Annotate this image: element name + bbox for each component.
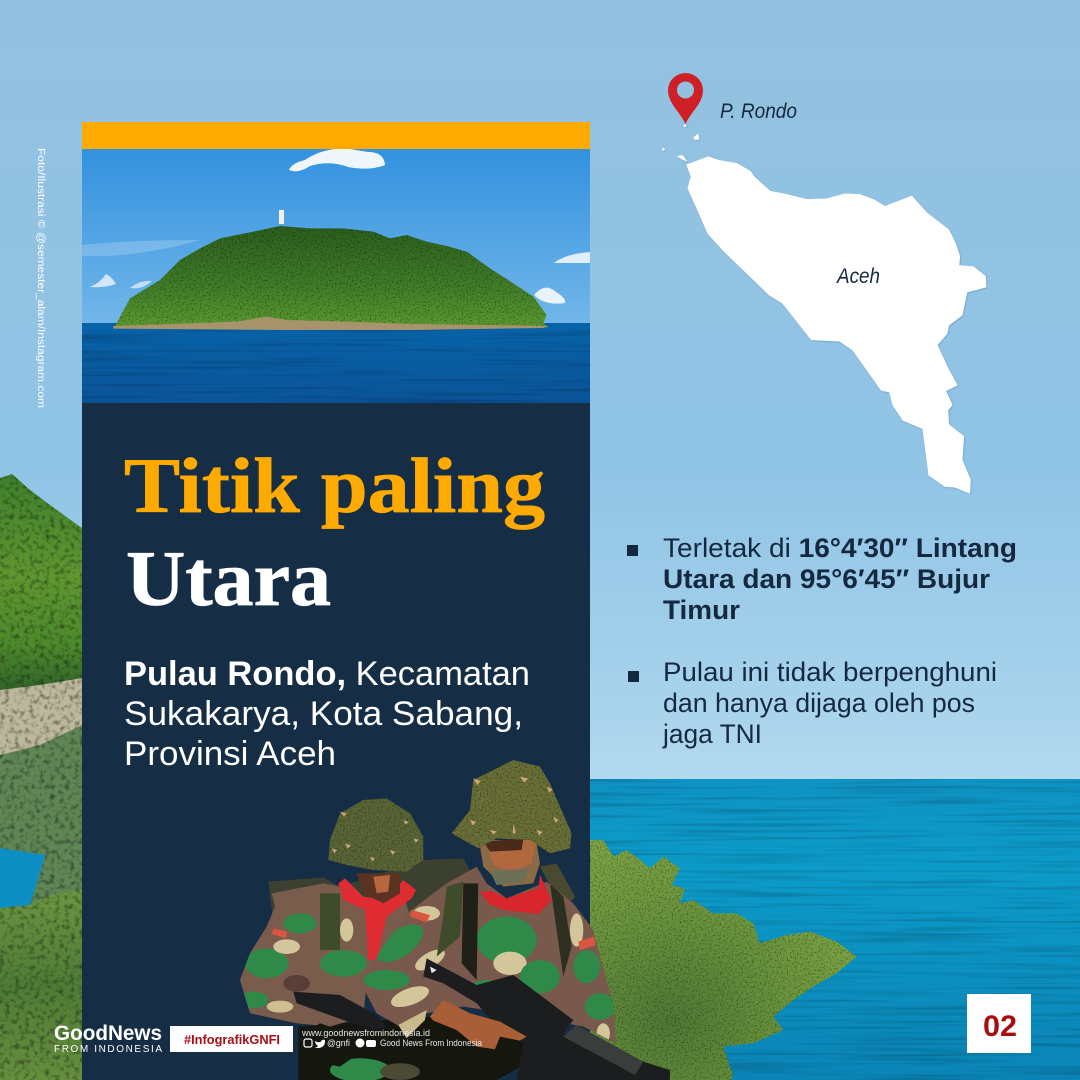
lower body shadows <box>298 1017 563 1080</box>
map pin: P. Rondo <box>668 73 703 124</box>
location description: Provinsi Aceh <box>124 735 336 773</box>
icon: twitter <box>315 1040 325 1048</box>
location description: Sukakarya, Kota Sabang, <box>124 695 523 733</box>
location description <box>124 655 530 773</box>
background: sea <box>0 779 1080 1080</box>
right soldier red scarf <box>480 875 552 914</box>
right soldier forearm and hand <box>430 1000 527 1049</box>
background: right bush <box>590 840 857 1080</box>
icon: facebook <box>356 1038 364 1048</box>
background: left coastal trees and cliff <box>0 474 82 1080</box>
fact 1: coordinates: Utara dan 95°6′45″ Bujur <box>663 564 991 594</box>
label: P. Rondo: P. Rondo <box>720 100 797 123</box>
right soldier shoulder patches <box>410 910 596 950</box>
social media links: www.goodnewsfromindonesia.id <box>301 1028 430 1038</box>
fact 1: coordinates <box>627 533 1017 625</box>
social media links: Good News From Indonesia <box>380 1038 482 1048</box>
logo: GoodNews From Indonesia <box>54 1022 162 1055</box>
photo: Rondo island <box>82 149 590 403</box>
logo: GoodNews From Indonesia: GoodNews <box>54 1022 162 1045</box>
hashtag badge: #InfografikGNFI <box>184 1032 280 1047</box>
orange header bar <box>82 122 590 149</box>
left soldier rifle <box>293 992 387 1030</box>
fact 2: uninhabited island: Pulau ini tidak berpenghuni <box>663 657 997 687</box>
fact 1: coordinates: Timur <box>663 595 741 625</box>
icon: youtube <box>366 1040 376 1047</box>
page number <box>967 994 1031 1053</box>
background: sky <box>0 0 1080 780</box>
fact 2: uninhabited island: jaga TNI <box>662 719 762 749</box>
fact 1: coordinates: Terletak di 16°4′30″ Lintang <box>663 533 1017 563</box>
icon: instagram <box>304 1039 312 1047</box>
left soldier red scarf <box>338 878 416 960</box>
location description: Pulau Rondo, Kecamatan <box>124 655 530 693</box>
social media links <box>301 1028 482 1048</box>
fact 2: uninhabited island <box>628 657 997 749</box>
left soldier shoulder patch <box>272 928 287 938</box>
left soldier glove <box>300 1023 363 1067</box>
map: Aceh province <box>662 124 986 493</box>
title: Utara <box>126 535 331 622</box>
social media links: @gnfi <box>327 1038 350 1048</box>
left soldier uniform <box>240 884 408 1026</box>
fact 2: uninhabited island: dan hanya dijaga oleh pos <box>663 688 975 718</box>
soldiers photo <box>230 760 670 1080</box>
right soldier helmet <box>452 760 572 853</box>
page number: 02 <box>983 1010 1017 1043</box>
backpacks <box>268 858 473 970</box>
right soldier uniform <box>363 866 616 1043</box>
left soldier face <box>357 873 400 903</box>
left soldier helmet <box>328 798 423 872</box>
lighthouse <box>279 210 284 224</box>
right soldier rifle <box>423 958 670 1080</box>
panel: dark title panel <box>82 403 590 1080</box>
right soldier cuff <box>398 1010 427 1038</box>
title <box>124 442 545 622</box>
title: Titik paling <box>124 442 545 529</box>
photo credit: Foto/Ilustrasi © @semester_alam/Instagram.com <box>35 148 46 408</box>
hashtag badge <box>170 1026 293 1052</box>
logo: GoodNews From Indonesia: FROM INDONESIA <box>54 1044 162 1055</box>
label: Aceh: Aceh <box>835 265 880 288</box>
right soldier neck guard and face <box>480 840 540 887</box>
small islands <box>677 133 699 162</box>
